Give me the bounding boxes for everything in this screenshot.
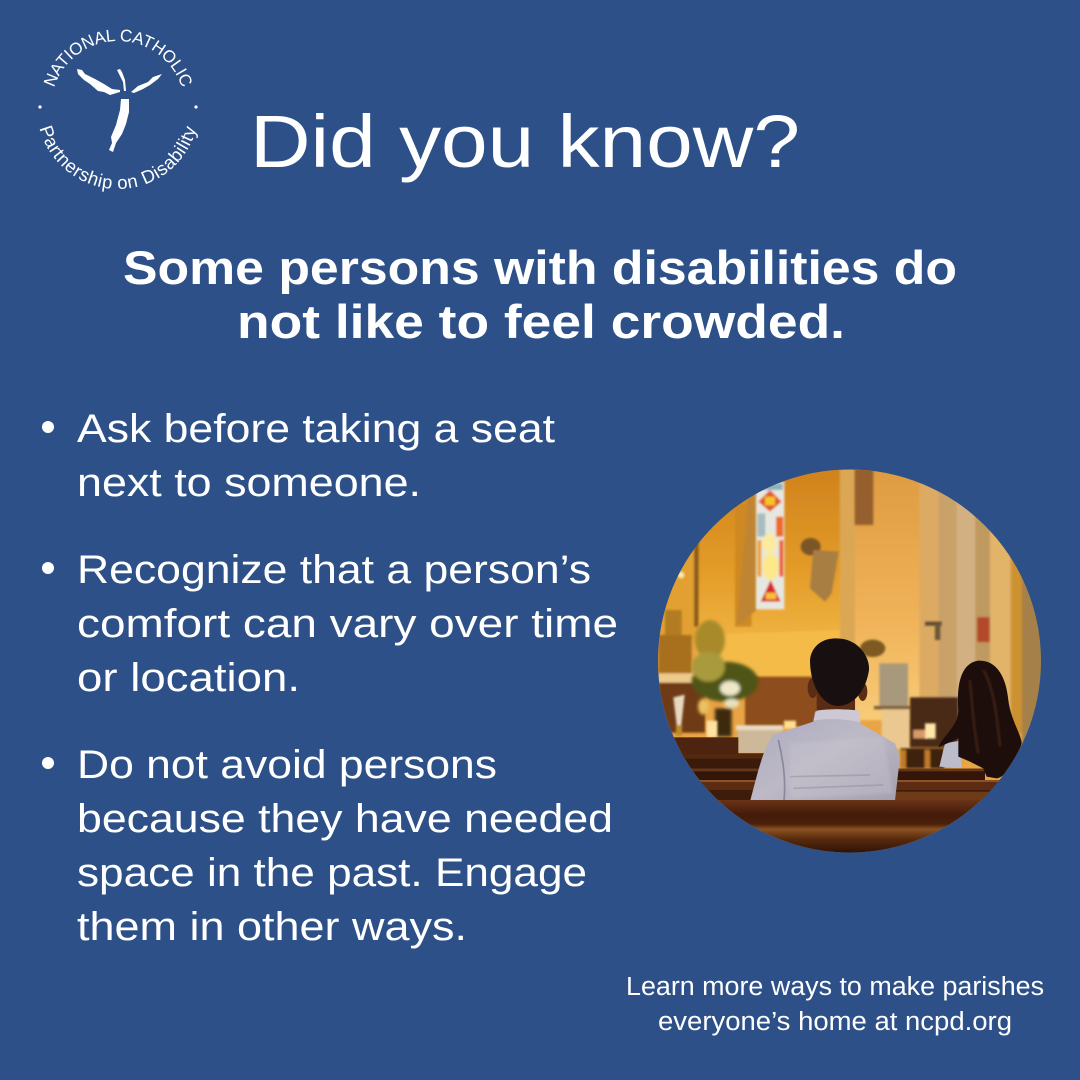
wood panel xyxy=(745,677,820,727)
stained glass window xyxy=(756,482,784,609)
lectern xyxy=(874,663,911,749)
bullet 3: space in the past. Engage xyxy=(77,851,587,895)
logo text: National Catholic: NATIONAL CATHOLIC xyxy=(44,30,192,86)
bullet 1: Ask before taking a seat xyxy=(77,407,555,451)
bullet 3 xyxy=(42,743,613,949)
footer line 1: Learn more ways to make parishes xyxy=(626,973,1044,1001)
subheading line 2: not like to feel crowded. xyxy=(237,295,845,348)
man's shirt xyxy=(750,709,900,802)
altar cloth xyxy=(673,695,783,753)
logo: National Catholic Partnership on Disability xyxy=(38,30,198,192)
bullet 3: Do not avoid persons xyxy=(77,743,497,787)
logo dot left xyxy=(38,105,42,109)
bullet 2: Recognize that a person’s xyxy=(77,548,591,592)
man's neck and ears xyxy=(808,678,867,712)
bullet 3: because they have needed xyxy=(77,797,613,841)
wall frame xyxy=(855,468,873,525)
candle on left wall xyxy=(678,572,684,578)
flower arrangement xyxy=(692,620,758,737)
subheading line 1: Some persons with disabilities do xyxy=(123,241,957,294)
candles xyxy=(707,721,936,739)
subheading xyxy=(123,241,957,348)
icon: stylised figure with raised arms xyxy=(77,69,162,152)
bullet 2 xyxy=(42,548,618,700)
wall statue xyxy=(801,538,839,602)
footer line 2: everyone’s home at ncpd.org xyxy=(658,1008,1012,1036)
woman with long dark hair xyxy=(938,661,1022,778)
bullet 2: comfort can vary over time xyxy=(77,602,618,646)
bullet 3: them in other ways. xyxy=(77,905,467,949)
background furniture xyxy=(901,697,958,768)
title: Did you know? xyxy=(250,100,800,183)
bullet 1: next to someone. xyxy=(77,461,421,505)
wall sconce and door handle xyxy=(860,617,989,657)
footer call to action xyxy=(626,973,1044,1036)
logo text: Partnership on Disability: Partnership on Disability xyxy=(40,126,198,192)
circular photo: two people in a church pew xyxy=(650,460,1050,860)
man's hair xyxy=(810,638,869,706)
front pew xyxy=(717,800,990,853)
logo dot right xyxy=(194,105,198,109)
altar xyxy=(658,610,705,733)
bullet list xyxy=(42,407,618,949)
bullet 1 xyxy=(42,407,555,505)
back pews xyxy=(673,737,1000,801)
bullet 2: or location. xyxy=(77,656,300,700)
church wall xyxy=(650,460,1050,860)
shirt collar and folds xyxy=(778,709,893,801)
